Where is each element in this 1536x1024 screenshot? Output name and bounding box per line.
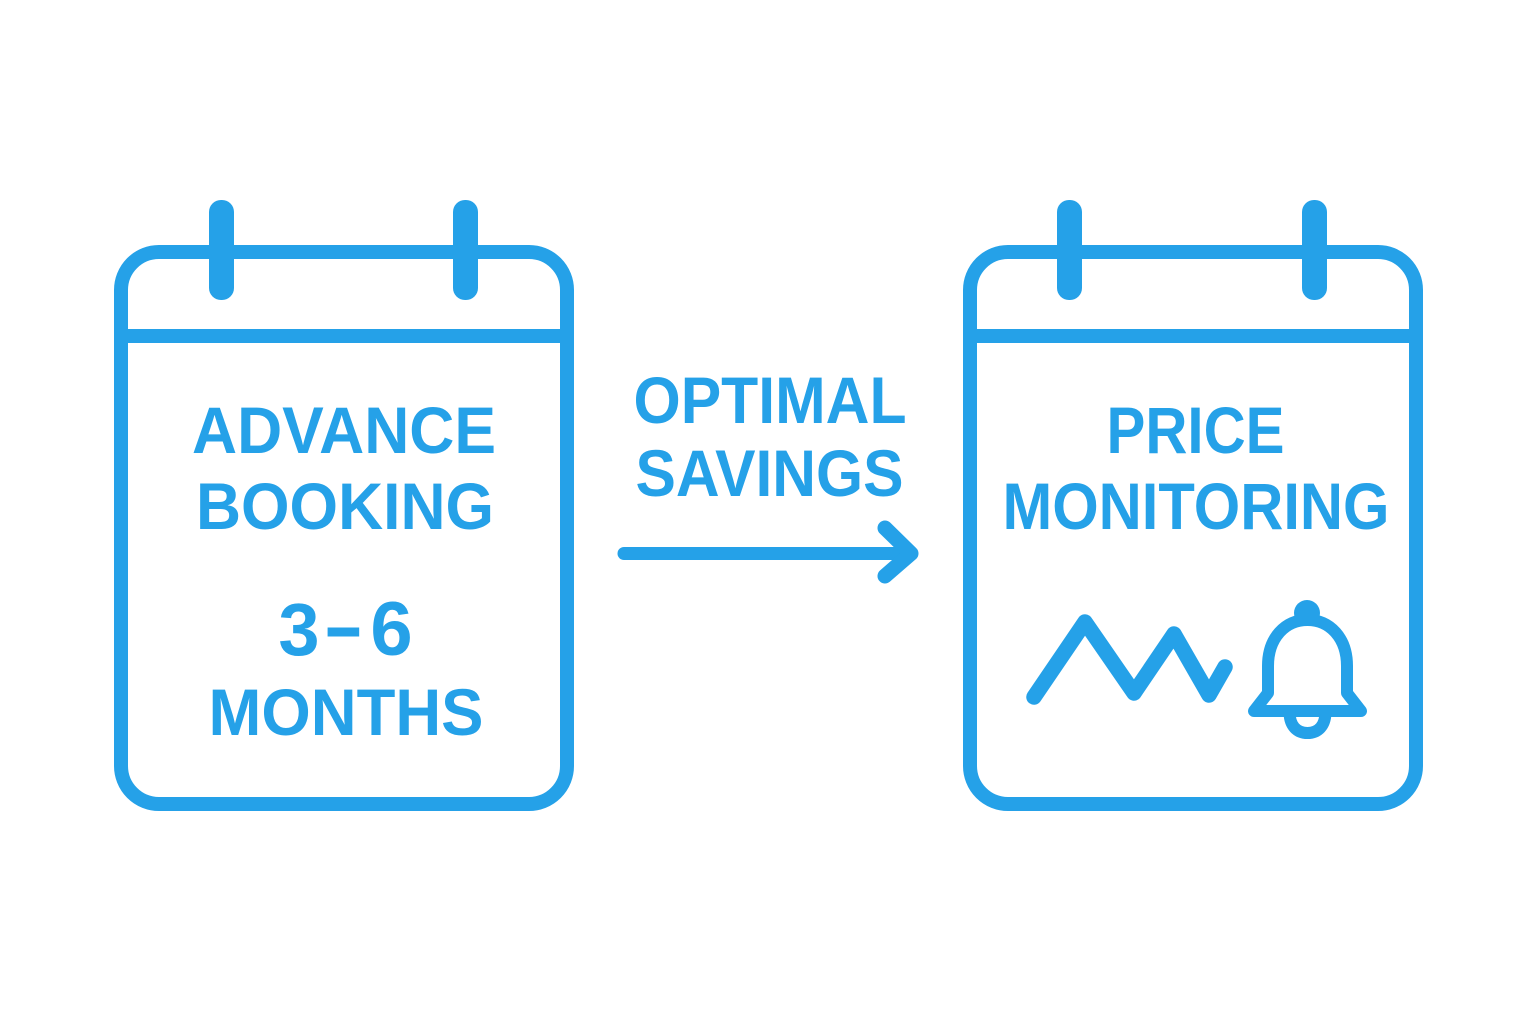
optimal savings label: OPTIMAL xyxy=(634,363,906,437)
optimal savings label: SAVINGS xyxy=(636,436,904,510)
calendar frame left xyxy=(121,252,567,804)
text: 3-6 months xyxy=(208,583,484,749)
heading: price monitoring xyxy=(1002,393,1390,543)
panel: advance booking calendar xyxy=(121,200,567,804)
heading: advance booking: BOOKING xyxy=(196,469,494,543)
optimal savings label xyxy=(634,363,906,510)
icon: price line chart xyxy=(1034,622,1225,697)
calendar header line right xyxy=(970,329,1416,343)
arrow xyxy=(624,528,911,576)
calendar ring right 1 xyxy=(1057,200,1082,300)
calendar ring left 2 xyxy=(453,200,478,300)
calendar ring right 2 xyxy=(1302,200,1327,300)
text: 3-6 months: 6 xyxy=(370,587,413,672)
calendar frame right xyxy=(970,252,1416,804)
calendar header line left xyxy=(121,329,567,343)
calendar ring left 1 xyxy=(209,200,234,300)
heading: advance booking: ADVANCE xyxy=(192,393,496,467)
heading: price monitoring: MONITORING xyxy=(1002,469,1390,543)
text: 3-6 months: MONTHS xyxy=(208,675,484,749)
panel: price monitoring calendar xyxy=(970,200,1416,804)
text: 3-6 months: 3 xyxy=(278,588,320,671)
heading: price monitoring: PRICE xyxy=(1106,393,1284,467)
heading: advance booking xyxy=(192,393,496,543)
icon: bell xyxy=(1254,600,1361,733)
text: 3-6 months: - xyxy=(323,583,364,668)
